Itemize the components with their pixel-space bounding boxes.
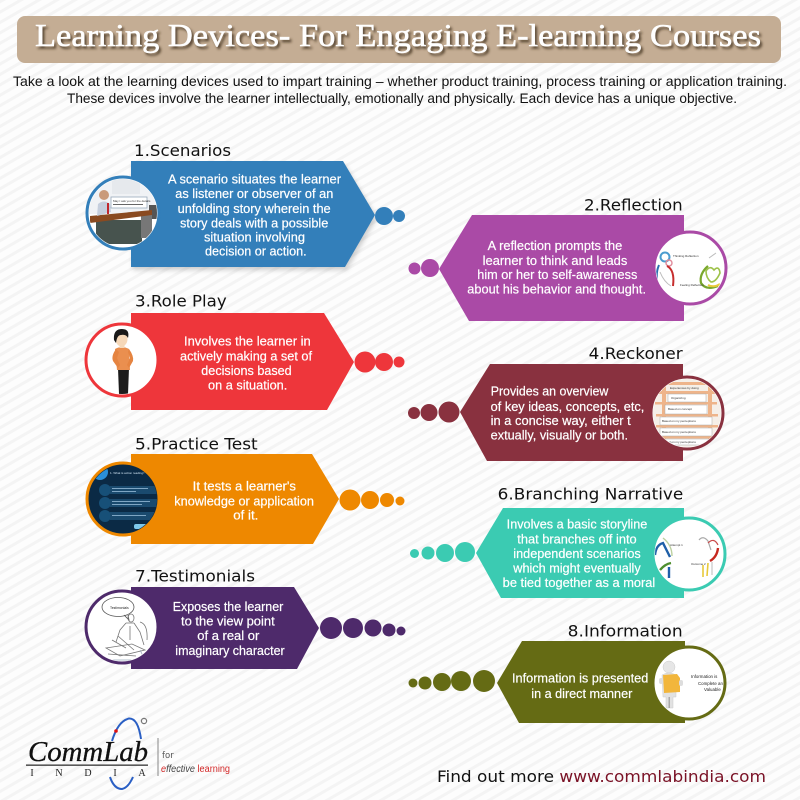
icon: figure with folder: Valuable	[704, 687, 721, 692]
description: to the view point	[181, 614, 275, 628]
logo: CommLab India: I	[113, 768, 117, 779]
footer link: Find out more www.commlabindia.com	[437, 767, 766, 786]
description: Exposes the learner	[173, 600, 283, 614]
description: A scenario situates the learner	[168, 172, 341, 186]
arrow shape	[131, 161, 375, 267]
connector dots	[375, 207, 405, 225]
connector dots	[408, 670, 495, 692]
arrow shape	[476, 508, 684, 598]
icon: branching figures: Outcome 2	[691, 562, 706, 566]
icon: thinking and feeling	[654, 232, 726, 304]
icon: thinking and feeling: Feeling Reflection	[680, 283, 704, 287]
heading: Reckoner: 4.Reckoner	[589, 344, 683, 363]
description: about his behavior and thought.	[467, 282, 646, 296]
description: knowledge or application	[174, 494, 314, 508]
logo: CommLab India	[26, 718, 230, 789]
panel: 6 Branching Narrative	[410, 484, 725, 598]
intro text: These devices involve the learner intellectually, emotionally and physically. Each device has a unique objective.	[67, 90, 737, 106]
connector dots	[320, 617, 406, 639]
description: decision or action.	[205, 244, 307, 258]
description: imaginary character	[175, 644, 285, 658]
description	[503, 518, 655, 590]
description: which might eventually	[512, 562, 641, 576]
heading: Testimonials: 7.Testimonials	[135, 567, 255, 586]
arrow shape	[131, 313, 354, 410]
icon: thinking and feeling: Thinking Reflection	[673, 254, 699, 258]
description: be tied together as a moral	[503, 576, 655, 590]
icon: branching figures	[653, 518, 725, 590]
arrow shape	[131, 587, 319, 669]
heading: Reflection: 2.Reflection	[584, 196, 683, 215]
description: A reflection prompts the	[488, 239, 622, 253]
heading: Information: 8.Information	[568, 622, 683, 641]
description: story deals with a possible	[180, 216, 328, 230]
description: It tests a learner's	[193, 480, 296, 494]
icon: quiz screen: 1. What is action reading?	[110, 471, 145, 475]
description: as listener or observer of an	[175, 187, 333, 201]
icon: quiz screen	[87, 463, 160, 535]
icon: office scenario: May I ask you for the details	[113, 199, 151, 203]
icon: figure with folder: Information is	[691, 674, 718, 679]
panel: 3 Role Play	[86, 292, 404, 410]
logo: CommLab India: N	[55, 768, 63, 779]
title: Learning Devices- For Engaging E-learning Courses	[35, 17, 761, 53]
arrow shape	[460, 364, 683, 461]
title banner	[17, 16, 781, 63]
intro text: Take a look at the learning devices used to impart training – whether product training, process training or application training.	[13, 73, 787, 89]
logo arcs	[110, 718, 141, 789]
panel: 2 Reflection	[408, 196, 726, 321]
description: in a direct manner	[531, 687, 632, 701]
description	[491, 384, 644, 442]
icon: ladder chart: Based on my perceptions	[662, 430, 696, 434]
description	[174, 480, 314, 522]
icon: ladder chart: Organizing	[671, 396, 686, 400]
panel: 7 Testimonials	[86, 567, 406, 669]
heading: Scenarios: 1.Scenarios	[134, 141, 231, 160]
description: decisions based	[201, 364, 292, 378]
arrow shape	[439, 215, 684, 321]
icon: ladder chart: Experiences by doing	[670, 386, 699, 390]
description: extually, visually or both.	[491, 428, 628, 442]
panel: 1 Scenarios	[87, 141, 405, 270]
description: Involves a basic storyline	[507, 518, 647, 532]
icon: standing man	[86, 324, 158, 396]
logo: CommLab India: for	[162, 751, 174, 761]
heading: Branching Narrative: 6.Branching Narrative	[498, 484, 683, 503]
description	[180, 334, 313, 392]
description: in a concise way, either t	[491, 414, 631, 428]
description: of key ideas, concepts, etc,	[491, 400, 644, 414]
description: Information is presented	[512, 672, 648, 686]
panel: 8 Information	[408, 622, 726, 723]
description	[512, 672, 648, 701]
panel: 4 Reckoner	[408, 344, 723, 461]
logo: CommLab India: A	[138, 768, 146, 779]
icon: figure with folder	[653, 647, 726, 719]
description	[467, 239, 646, 296]
description: of a real or	[197, 629, 259, 643]
description: him or her to self-awareness	[477, 268, 637, 282]
icon: ladder chart	[651, 377, 723, 449]
connector dots	[410, 542, 475, 562]
description: of it.	[233, 508, 258, 522]
description: unfolding story wherein the	[178, 202, 331, 216]
description: situation involving	[204, 230, 305, 244]
logo: CommLab India: CommLab	[28, 736, 148, 768]
logo: CommLab India: effective learning	[161, 764, 230, 775]
logo: CommLab India: I	[30, 768, 34, 779]
heading: Role Play: 3.Role Play	[135, 292, 227, 311]
description: that branches off into	[517, 532, 637, 546]
connector dots	[408, 259, 439, 277]
heading: Practice Test: 5.Practice Test	[135, 434, 258, 453]
icon: ladder chart: Based on concept	[668, 407, 692, 411]
description: actively making a set of	[180, 350, 313, 364]
icon: sketch of speaker	[86, 591, 158, 663]
icon: ladder chart: Based on my perceptions	[662, 440, 696, 444]
description: learner to think and leads	[483, 254, 627, 268]
connector dots	[354, 352, 404, 372]
description	[168, 172, 341, 258]
connector dots	[408, 402, 460, 422]
icon: office scenario	[87, 177, 159, 249]
arrow shape	[497, 641, 685, 723]
description: independent scenarios	[513, 547, 641, 561]
arrow shape	[131, 454, 339, 544]
logo: CommLab India: D	[84, 768, 92, 779]
connector dots	[340, 490, 404, 510]
description: Involves the learner in	[184, 334, 311, 348]
icon: ladder chart: Based on my perceptions	[662, 419, 696, 423]
description	[173, 600, 285, 658]
icon: sketch of speaker: Testimonials	[110, 606, 129, 610]
icon: branching figures: Attempt 1	[670, 543, 683, 547]
description: Provides an overview	[491, 384, 609, 398]
icon: figure with folder: Complete and	[698, 681, 726, 686]
intro text	[13, 73, 787, 106]
panel: 5 Practice Test	[87, 434, 404, 544]
description: on a situation.	[208, 378, 287, 392]
